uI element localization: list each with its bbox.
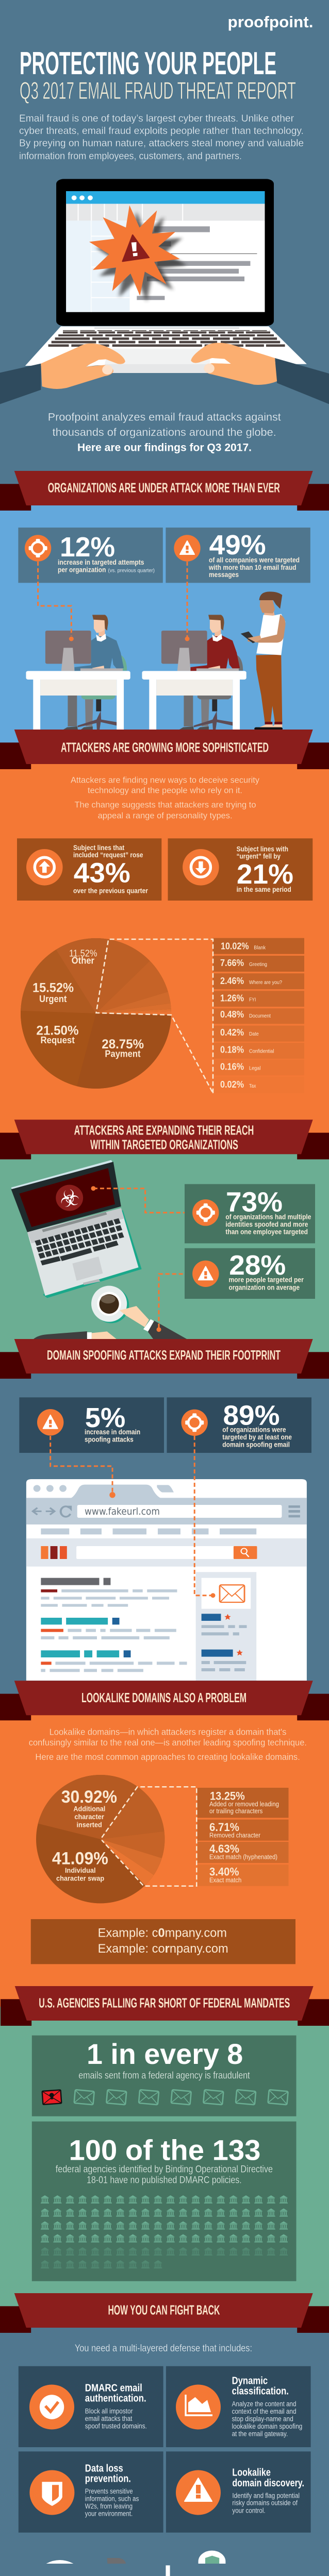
alert burst: [89, 205, 180, 296]
right sleeve: [275, 358, 329, 404]
intro text: information from employees, customers, and partners.: [19, 151, 242, 162]
icon: up arrow: [26, 849, 63, 886]
chart: subject line breakdown table: Confidential: [249, 1048, 274, 1054]
chart: subject line breakdown table: Tax: [249, 1083, 256, 1089]
panel: lookalike domain discovery: your control.: [232, 2506, 266, 2514]
panel: lookalike domain discovery: Identify and flag potential: [232, 2492, 300, 2499]
chart: subject line breakdown table: 10.02%: [221, 941, 249, 951]
pie labels: character: [74, 1812, 104, 1821]
panel: request rose 43%: over the previous quarter: [73, 887, 149, 894]
panel: lookalike examples: Example: c0mpany.com: [98, 1926, 227, 1940]
panel: 73% stat: [185, 1184, 315, 1243]
icon: warning triangle: [123, 235, 149, 261]
arrow: pie breakout dashes: [96, 939, 213, 1093]
panel: DMARC email authentication: [19, 2366, 163, 2447]
intro text: By preying on human nature, attackers steal money and valuable: [19, 138, 304, 149]
illustration: browser window: [26, 1479, 307, 1681]
window controls and tabs: [34, 1485, 174, 1498]
intro text: Email fraud is one of today’s largest cyber threats. Unlike other: [19, 113, 294, 124]
pie labels: Payment: [105, 1049, 141, 1059]
icon: target: [192, 1199, 219, 1226]
pie labels: 30.92%: [61, 1787, 117, 1807]
icons: agencies without DMARC: [41, 2195, 288, 2242]
intro findings text: Here are our findings for Q3 2017.: [77, 442, 252, 454]
chart: lookalike breakdown table: Added or removed leading: [209, 1800, 279, 1808]
pie labels: 21.50%: [36, 1024, 79, 1038]
panel: data loss prevention: [19, 2451, 163, 2533]
left sleeve: [0, 364, 41, 404]
icon: warning: [37, 1409, 63, 1435]
chart: subject line breakdown table: FYI: [249, 996, 256, 1003]
panel: data loss prevention: your environment.: [85, 2510, 133, 2517]
standing woman with tablet: [241, 591, 285, 730]
panel: 100 of the 133: 100 of the 133: [69, 2133, 260, 2166]
panel: 100 of the 133: 18-01 have no published DMARC policies.: [87, 2175, 242, 2185]
icon: chart: [176, 2384, 221, 2430]
laptop screen: [56, 179, 274, 326]
browser frame: [26, 1479, 307, 1681]
panel: 89% stat: of organizations were: [222, 1426, 286, 1433]
panel: 1 in every 8: [32, 2036, 297, 2116]
panel: urgent fell 21%: “urgent” fell by: [237, 853, 281, 860]
chart: lookalike breakdown table: or trailing characters: [209, 1807, 263, 1815]
panel: data loss prevention: prevention.: [85, 2473, 131, 2484]
result list: [41, 1578, 187, 1672]
ribbon heading: expanding reach: WITHIN TARGETED ORGANIZATIONS: [90, 1137, 238, 1153]
laptop base: [27, 1208, 142, 1298]
icons: remaining agencies: [41, 2247, 288, 2268]
panel: data loss prevention: information, such as: [85, 2495, 139, 2502]
icon: warning: [176, 2470, 221, 2515]
navigation bars: [41, 1529, 256, 1534]
panel: urgent fell 21%: in the same period: [237, 886, 291, 893]
panel: urgent fell 21%: 21%: [237, 859, 293, 890]
panel: 5% stat: [19, 1397, 164, 1453]
arrow: 89% dashed connector: [194, 1436, 216, 1598]
panel: data loss prevention: W2s, from leaving: [85, 2502, 133, 2510]
arrow: 5% dashed connector: [51, 1436, 116, 1498]
panel: urgent fell 21%: Subject lines with: [237, 845, 288, 853]
icon: shield: [29, 2470, 74, 2515]
panel: 12% stat: 12%: [60, 532, 115, 563]
text: sophistication intro: appeal a range of personality types.: [98, 810, 233, 820]
panel: DMARC email authentication: email attacks that: [85, 2415, 133, 2422]
panel: 49% stat: with more than 10 email fraud: [208, 564, 296, 571]
grey shape: [107, 2558, 126, 2564]
icon: check: [29, 2384, 74, 2430]
panel: 28% stat: 28%: [229, 1250, 286, 1281]
pie labels: Individual: [65, 1866, 96, 1874]
chart: subject line breakdown table: 2.46%: [220, 976, 244, 986]
icon: target: [25, 535, 51, 562]
chart: subject line breakdown table: Document: [249, 1013, 271, 1019]
text: sophistication intro: technology and the people who rely on it.: [88, 785, 242, 795]
panel: DMARC email authentication: DMARC email: [85, 2383, 142, 2394]
ribbon heading: expanding reach: [0, 1120, 329, 1159]
ribbon heading: us agencies: [1, 1986, 329, 2026]
panel: 89% stat: domain spoofing email: [222, 1440, 290, 1448]
panel: request rose 43%: included “request” rose: [73, 851, 143, 859]
other hand: [34, 1331, 117, 1339]
chart: subject line breakdown table: 0.42%: [220, 1027, 244, 1038]
logo: proofpoint: proofpoint.: [228, 13, 314, 31]
text: lookalike intro: [29, 1726, 307, 1762]
panel: 49% stat: of all companies were targeted: [209, 556, 300, 564]
panel: 1 in every 8: 1 in every 8: [87, 2038, 243, 2070]
panel: 28% stat: organization on average: [229, 1283, 300, 1291]
pie labels: Urgent: [39, 994, 67, 1004]
panel: lookalike examples: [31, 1919, 295, 1964]
alert burst shadow: [96, 211, 187, 302]
chart: subject line breakdown table: 0.16%: [220, 1062, 244, 1072]
ribbon heading: domain spoofing: [0, 1339, 329, 1379]
laptop lid: [11, 1160, 121, 1232]
small dome: [46, 2560, 73, 2564]
intro text: cyber threats, email fraud exploits people rather than technology.: [19, 126, 304, 137]
chart: lookalike breakdown table: Removed character: [209, 1832, 261, 1839]
pie labels: inserted: [76, 1821, 102, 1829]
chart: subject line pie: [21, 938, 171, 1089]
arrow: 49% dashed connector: [185, 562, 190, 641]
text: sophistication intro: [71, 775, 259, 820]
panel: dynamic classification: [166, 2366, 311, 2447]
panel: 73% stat: than one employee targeted: [225, 1228, 308, 1235]
intro findings text: thousands of organizations around the globe.: [53, 427, 276, 438]
panel: lookalike domain discovery: risky domains outside of: [232, 2499, 298, 2507]
icons: legitimate emails: [74, 2090, 288, 2105]
panel: dynamic classification: at the email gateway.: [232, 2430, 288, 2437]
panel: 100 of the 133: [32, 2122, 297, 2281]
panel: 49% stat: [166, 528, 310, 583]
panel: 12% stat: (vs. previous quarter): [108, 568, 155, 574]
chart: lookalike breakdown table: Exact match (hyphenated): [209, 1853, 277, 1860]
text: lookalike intro: Lookalike domains—in which attackers register a domain that's: [50, 1726, 287, 1737]
ribbon heading: lookalike domains: [0, 1681, 329, 1720]
panel: 49% stat: 49%: [209, 530, 266, 561]
panel: request rose 43%: Subject lines that: [73, 844, 125, 852]
chart: lookalike breakdown table: 4.63%: [209, 1842, 239, 1855]
panel: request rose 43%: 43%: [74, 858, 130, 889]
panel: 73% stat: of organizations had multiple: [225, 1213, 311, 1221]
right hand: [191, 343, 277, 385]
panel: lookalike domain discovery: [166, 2451, 311, 2533]
worker at desk: blue sweater: [26, 615, 130, 731]
chart: lookalike breakdown table: Exact match: [209, 1876, 241, 1884]
chart: subject line breakdown table: 0.02%: [220, 1079, 244, 1090]
ribbon heading: fight back: [0, 2293, 329, 2333]
pie labels: [52, 1787, 117, 1882]
hand holding cup: [120, 1306, 187, 1339]
panel: dynamic classification: Dynamic: [232, 2376, 268, 2387]
icon: down arrow: [183, 849, 219, 886]
panel: 73% stat: identities spoofed and more: [225, 1221, 308, 1228]
chart: subject line breakdown table: Blank: [254, 944, 266, 951]
intro text: [19, 113, 304, 162]
panel: lookalike domain discovery: Lookalike: [232, 2467, 271, 2479]
arrow: lookalike pie breakout dashes: [102, 1787, 196, 1886]
url text: www.fakeurl.com: [85, 1506, 160, 1517]
pie labels: Other: [72, 956, 94, 966]
panel: 28% stat: more people targeted per: [229, 1276, 304, 1284]
panel: 12% stat: increase in targeted attempts: [58, 558, 144, 566]
chart: subject line breakdown table: [213, 938, 304, 1093]
chart: lookalike breakdown table: 6.71%: [209, 1821, 239, 1834]
illustration: closing desk scene: [29, 2551, 280, 2576]
panel: 5% stat: spoofing attacks: [85, 1436, 134, 1444]
chart: lookalike pie: [36, 1775, 164, 1903]
text: lookalike intro: confusingly similar to the real one—is another leading spoofing technique.: [29, 1737, 307, 1748]
laptop keyboard base: [25, 326, 307, 373]
sidebar with email icon: [196, 1572, 256, 1681]
panel: 5% stat: increase in domain: [85, 1428, 140, 1436]
chart: subject line breakdown table: Greeting: [249, 961, 267, 968]
illustration: office workers: [26, 591, 285, 731]
panel: dynamic classification: stop display-name and: [232, 2415, 293, 2422]
panel: 12% stat: [18, 528, 163, 583]
pie labels: 11.52%: [69, 948, 97, 959]
text: lookalike intro: Here are the most common approaches to creating lookalike domains.: [35, 1752, 300, 1762]
panel: dynamic classification: classification.: [232, 2386, 289, 2397]
arrow: 12% dashed connector: [38, 562, 74, 641]
ribbon heading: organizations: [0, 471, 329, 511]
panel: 73% stat: 73%: [226, 1187, 283, 1218]
chart: subject line breakdown table: 0.18%: [220, 1044, 244, 1055]
intro findings text: [48, 412, 281, 454]
ribbon heading: attackers sophisticated: [0, 730, 329, 769]
text: sophistication intro: The change suggests that attackers are trying to: [74, 800, 256, 810]
search strip: [26, 1538, 307, 1567]
panel: data loss prevention: Data loss: [85, 2463, 123, 2474]
pie labels: Additional: [73, 1805, 105, 1813]
pie labels: character swap: [56, 1874, 104, 1882]
panel: 12% stat: per organization: [58, 566, 106, 574]
pie labels: [32, 948, 144, 1059]
panel: 89% stat: 89%: [223, 1400, 279, 1431]
panel: dynamic classification: context of the email and: [232, 2408, 296, 2415]
panel: dynamic classification: lookalike domain spoofing: [232, 2422, 302, 2430]
intro findings text: Proofpoint analyzes email fraud attacks against: [48, 412, 281, 423]
icon: biohazard: ☣: [57, 1183, 83, 1214]
arrow: 73% dashed connector: [91, 1186, 194, 1213]
panel: lookalike domain discovery: domain discovery.: [232, 2478, 304, 2489]
white post: [166, 2565, 170, 2576]
illustration: laptop from above with coffee: [11, 1160, 187, 1339]
illustration: laptop with alert and hands: [0, 179, 329, 404]
panel: 1 in every 8: emails sent from a federal agency is fraudulent: [78, 2070, 250, 2081]
arrow: 28% dashed connector: [157, 1274, 194, 1332]
left hand: [41, 344, 125, 389]
worker at desk: red sweater: [142, 615, 246, 731]
icon: fraudulent email: [42, 2090, 61, 2105]
panel: 28% stat: [185, 1248, 315, 1299]
panel: urgent fell 21%: [168, 838, 312, 901]
panel: data loss prevention: Prevents sensitive: [85, 2487, 133, 2495]
pie labels: 41.09%: [52, 1849, 108, 1868]
panel: DMARC email authentication: spoof trusted domains.: [85, 2422, 147, 2430]
panel: lookalike examples: Example: cornpany.com: [98, 1942, 228, 1956]
chart: lookalike breakdown table: 3.40%: [209, 1866, 239, 1878]
icon: warning: [192, 1261, 219, 1287]
chart: subject line breakdown table: 7.66%: [220, 958, 244, 968]
panel: 49% stat: messages: [209, 571, 239, 579]
chart: subject line breakdown table: Where are you?: [249, 979, 282, 986]
panel: request rose 43%: [17, 838, 161, 901]
pie labels: 15.52%: [32, 981, 74, 995]
chart: lookalike breakdown table: 13.25%: [210, 1789, 245, 1802]
panel: dynamic classification: Analyze the content and: [232, 2400, 296, 2408]
coffee cup: [91, 1286, 129, 1323]
text: sophistication intro: Attackers are finding new ways to deceive security: [71, 775, 259, 785]
panel: DMARC email authentication: Block all impostor: [85, 2407, 133, 2415]
chart: subject line breakdown table: 0.48%: [220, 1009, 244, 1020]
panel: 100 of the 133: federal agencies identified by Binding Operational Directive: [56, 2164, 273, 2175]
icon: warning: [174, 535, 201, 562]
panel: DMARC email authentication: authentication.: [85, 2393, 146, 2404]
text: defense intro: You need a multi-layered defense that includes:: [75, 2343, 252, 2354]
panel: 89% stat: targeted by at least one: [222, 1433, 292, 1441]
icon: target: [182, 1410, 208, 1436]
ribbon heading: fight back: HOW YOU CAN FIGHT BACK: [108, 2302, 220, 2317]
chart: subject line breakdown table: Legal: [249, 1065, 260, 1072]
panel: 89% stat: [167, 1397, 311, 1453]
pie labels: Request: [40, 1035, 75, 1045]
pie labels: 28.75%: [102, 1037, 144, 1052]
panel: 5% stat: 5%: [85, 1402, 125, 1433]
chart: lookalike breakdown table: [197, 1788, 289, 1886]
toolbar: [26, 1498, 307, 1524]
badge dome with shield: [199, 2551, 225, 2564]
chart: subject line breakdown table: 1.26%: [220, 993, 244, 1003]
chart: subject line breakdown table: Date: [249, 1031, 259, 1037]
